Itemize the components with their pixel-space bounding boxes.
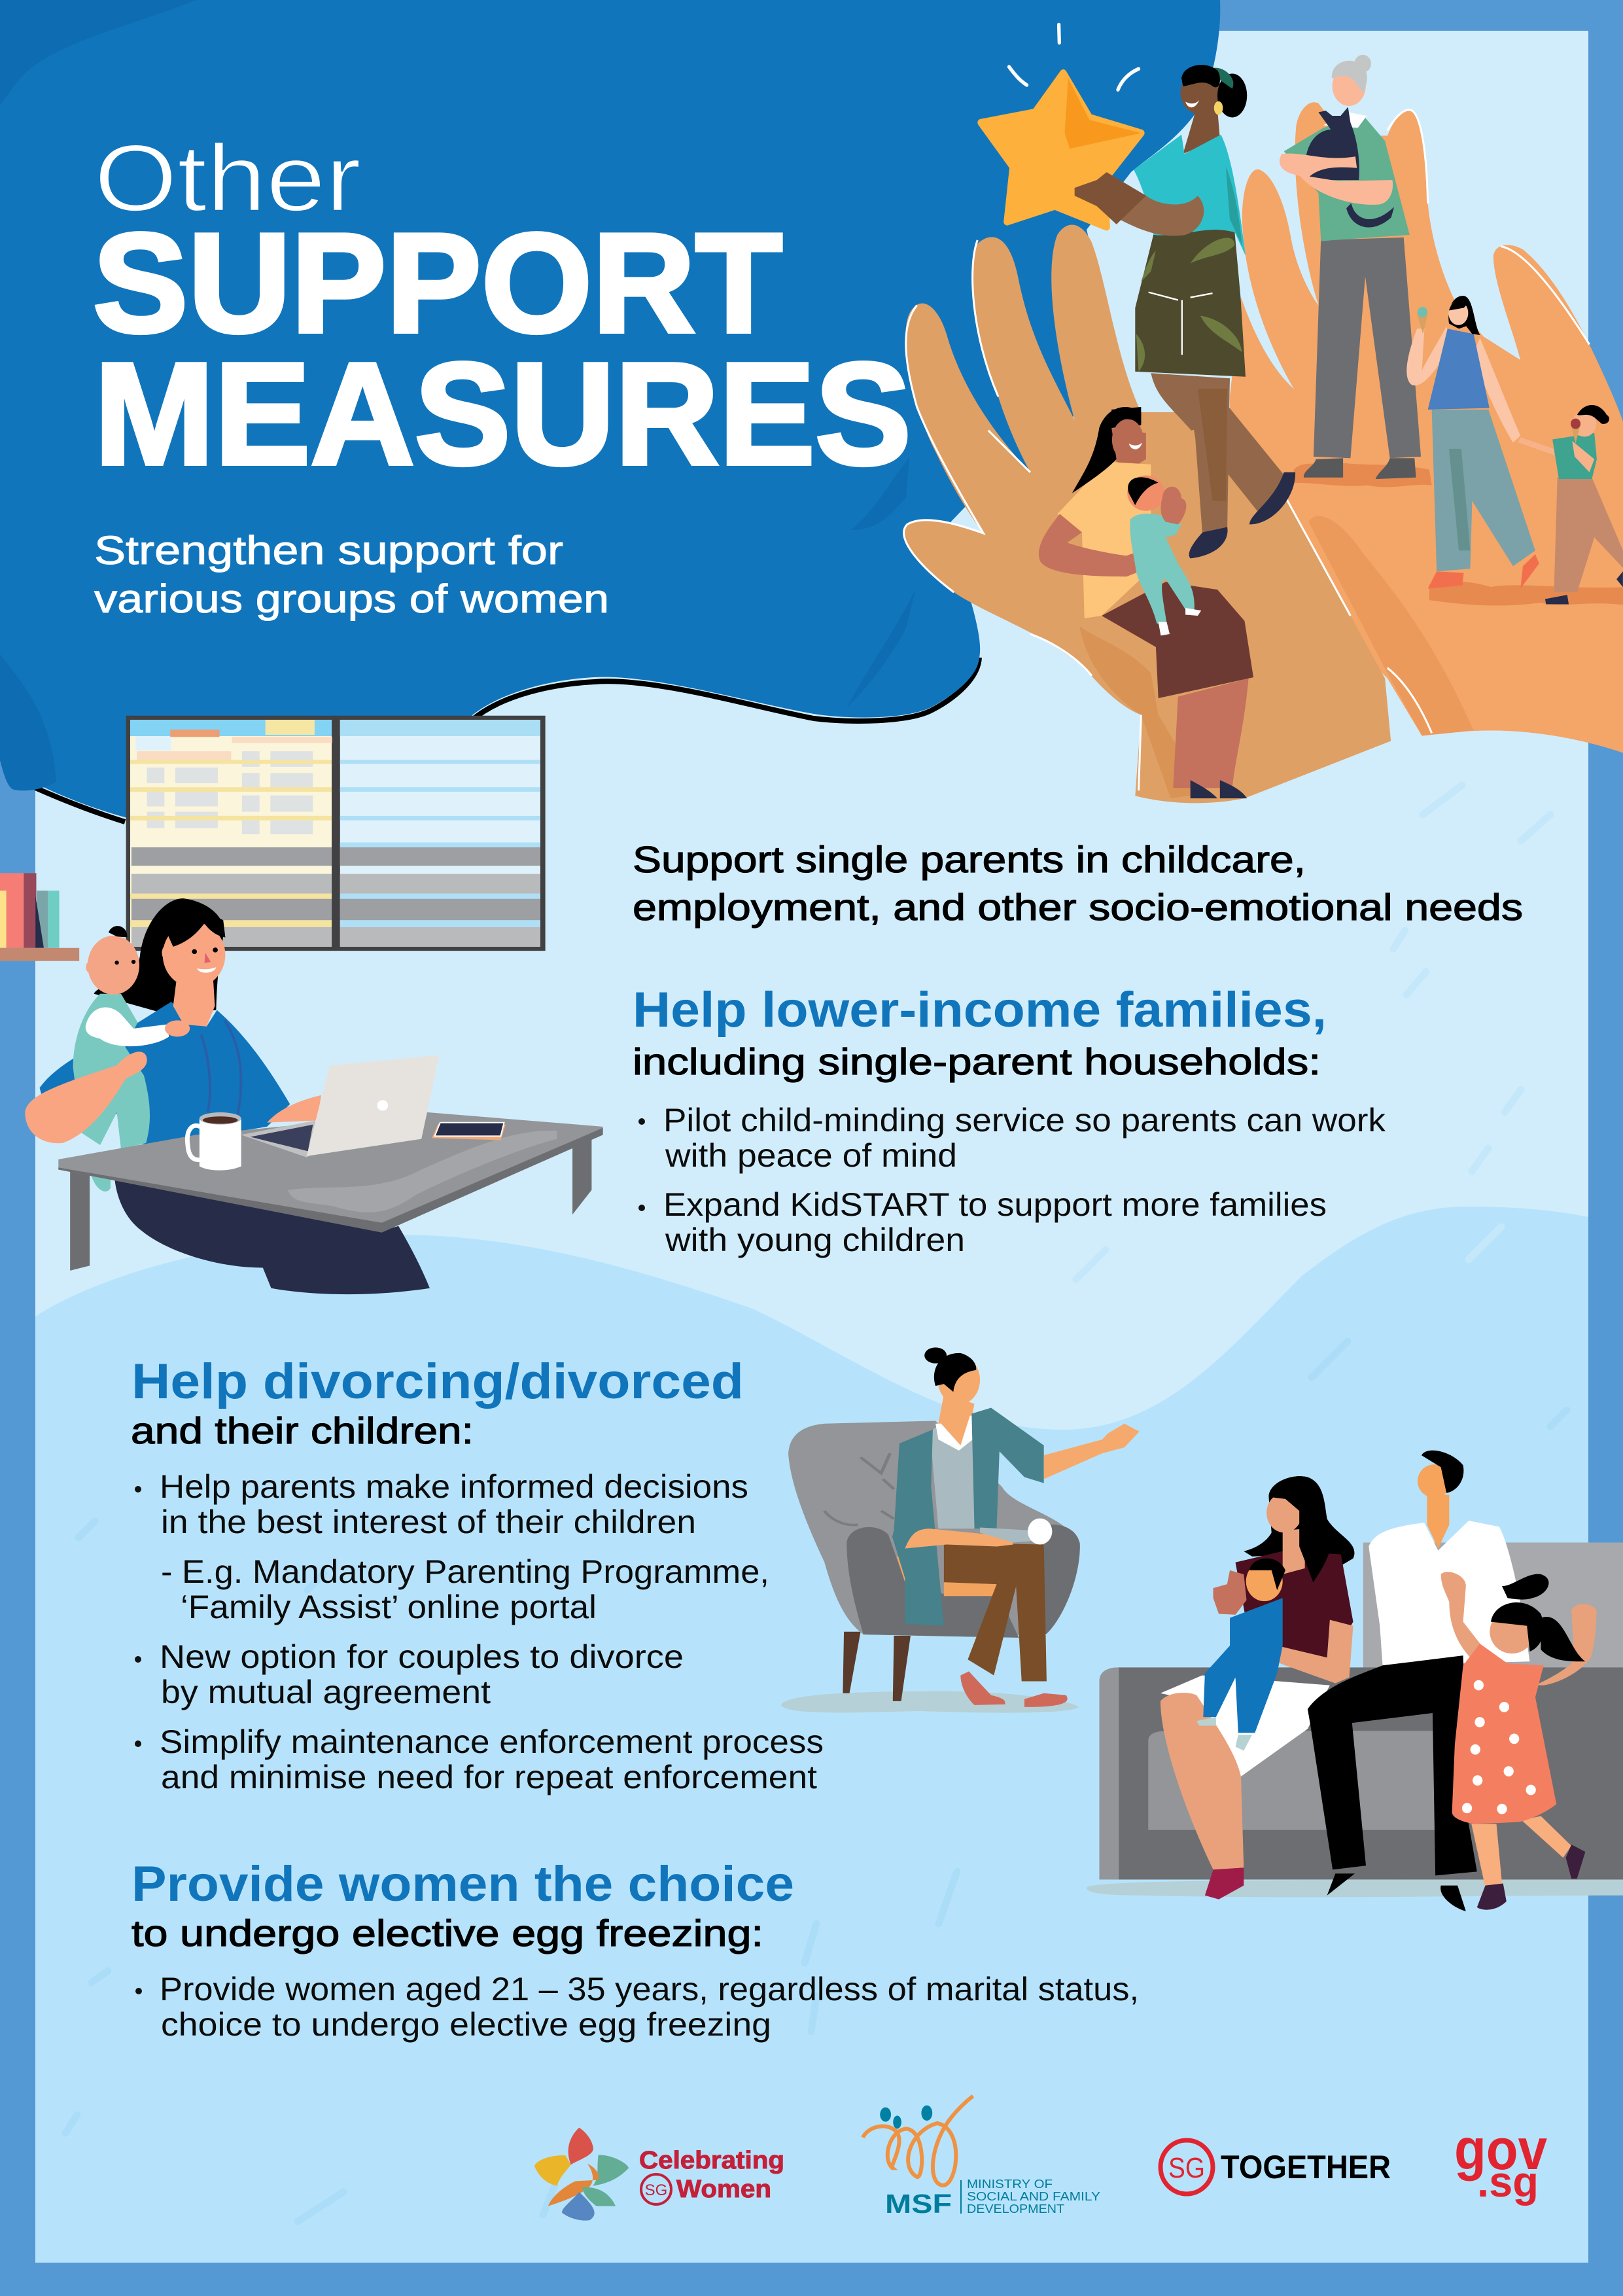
section: help divorcing/divorced: Help divorcing/divorced: [131, 1354, 744, 1409]
trousers: [114, 1180, 430, 1294]
logo: Celebrating SG Women: SG: [645, 2181, 667, 2199]
section: help divorcing/divorced: and their children:: [131, 1410, 474, 1452]
blob shading marks: [0, 0, 916, 790]
mother with toddler: [1161, 1476, 1354, 1899]
laptop: [241, 1055, 440, 1157]
sitting mother with baby: [1039, 407, 1253, 798]
section: provide women the choice: [131, 1856, 1139, 2043]
logo: gov.sg: gov: [1454, 2117, 1547, 2181]
counsellor: [892, 1347, 1140, 1707]
logo: MSF: SOCIAL AND FAMILY: [967, 2190, 1100, 2203]
logo: Celebrating SG Women: Celebrating: [639, 2147, 784, 2174]
illustration: mother with baby working at desk: [0, 716, 603, 1294]
panel: blue title blob: [0, 0, 1220, 828]
section: help lower-income families: Pilot child-minding service so parents can work: [663, 1102, 1386, 1139]
section: help lower-income families: [633, 982, 1386, 1258]
logo: gov.sg: .sg: [1477, 2157, 1539, 2206]
sofa: [1087, 1542, 1623, 1897]
panel: lower wave background: [35, 1207, 1588, 2263]
grandmother with cat: [1280, 55, 1421, 479]
logo: MSF: MSF: [885, 2189, 952, 2219]
section: support single parents: [633, 839, 1523, 928]
section: help lower-income families: Expand KidSTART to support more families: [663, 1186, 1327, 1223]
father: [1308, 1451, 1529, 1911]
dancing girl: [1441, 1572, 1597, 1910]
logo: MSF: [863, 2096, 1100, 2219]
bookshelf: [0, 873, 79, 961]
title: MEASURES: [94, 333, 911, 495]
section: help divorcing/divorced: ‘Family Assist’ online portal: [181, 1589, 597, 1625]
title: Other: [94, 125, 361, 231]
subtitle: various groups of women: [94, 576, 609, 621]
title: [93, 125, 911, 495]
section: help divorcing/divorced: [131, 1354, 824, 1795]
floor shadow: [781, 1691, 1079, 1713]
section: support single parents: employment, and other socio-emotional needs: [633, 887, 1523, 928]
window with blinds: [126, 716, 546, 951]
desk: [58, 1112, 603, 1271]
illustration: counsellor in armchair: [781, 1347, 1140, 1713]
section: help divorcing/divorced: Simplify maintenance enforcement process: [160, 1723, 824, 1760]
logo: MSF: MINISTRY OF: [967, 2178, 1053, 2191]
subtitle: Strengthen support for: [94, 528, 563, 573]
star: [981, 73, 1146, 227]
section: support single parents: Support single parents in childcare,: [633, 839, 1306, 881]
woman holding star: [1075, 65, 1295, 558]
section: help lower-income families: with peace of mind: [665, 1137, 957, 1174]
logo: SG Together: SG: [1168, 2152, 1205, 2184]
logo: Celebrating SG Women: Women: [676, 2176, 771, 2203]
title: SUPPORT: [93, 203, 782, 362]
logo: MSF: DEVELOPMENT: [967, 2202, 1064, 2216]
logo: SG Together: [1161, 2140, 1391, 2194]
section: help divorcing/divorced: Help parents make informed decisions: [160, 1468, 748, 1505]
section: help divorcing/divorced: - E.g. Mandatory Parenting Programme,: [161, 1553, 769, 1590]
illustration: family on sofa: [1087, 1451, 1623, 1911]
left hand: [904, 224, 1391, 803]
right hand: [1230, 102, 1623, 754]
subtitle: [94, 528, 609, 621]
logo: SG Together: TOGETHER: [1221, 2149, 1391, 2185]
section: help lower-income families: with young children: [665, 1222, 965, 1258]
sparkles: [1009, 24, 1139, 90]
armchair: [788, 1421, 1080, 1701]
panel: blue title blob outline: [35, 658, 979, 822]
section: provide women the choice: choice to undergo elective egg freezing: [161, 2006, 771, 2043]
flower mark: [534, 2128, 629, 2221]
section: provide women the choice: Provide women aged 21 – 35 years, regardless of marital status,: [160, 1971, 1139, 2007]
woman in blue top with ice cream: [1406, 296, 1539, 589]
coffee mug: [187, 1112, 241, 1171]
section: provide women the choice: Provide women the choice: [131, 1856, 794, 1912]
section: provide women the choice: to undergo elective egg freezing:: [131, 1913, 763, 1954]
section: help lower-income families: including single-parent households:: [633, 1041, 1321, 1083]
logo: Celebrating SG Women: [534, 2128, 784, 2221]
section: help lower-income families: Help lower-income families,: [633, 982, 1327, 1038]
section: help divorcing/divorced: in the best interest of their children: [161, 1504, 696, 1540]
section: help divorcing/divorced: and minimise need for repeat enforcement: [161, 1759, 817, 1795]
logo: gov.sg: [1454, 2117, 1547, 2206]
section: help divorcing/divorced: New option for couples to divorce: [160, 1638, 684, 1675]
section: help divorcing/divorced: by mutual agreement: [161, 1674, 491, 1710]
woman and baby: [25, 898, 321, 1192]
phone: [432, 1123, 506, 1140]
child with ice cream: [1518, 405, 1623, 605]
illustration: hands and women holding a star: [904, 24, 1623, 803]
background brush marks: [65, 785, 1567, 2221]
